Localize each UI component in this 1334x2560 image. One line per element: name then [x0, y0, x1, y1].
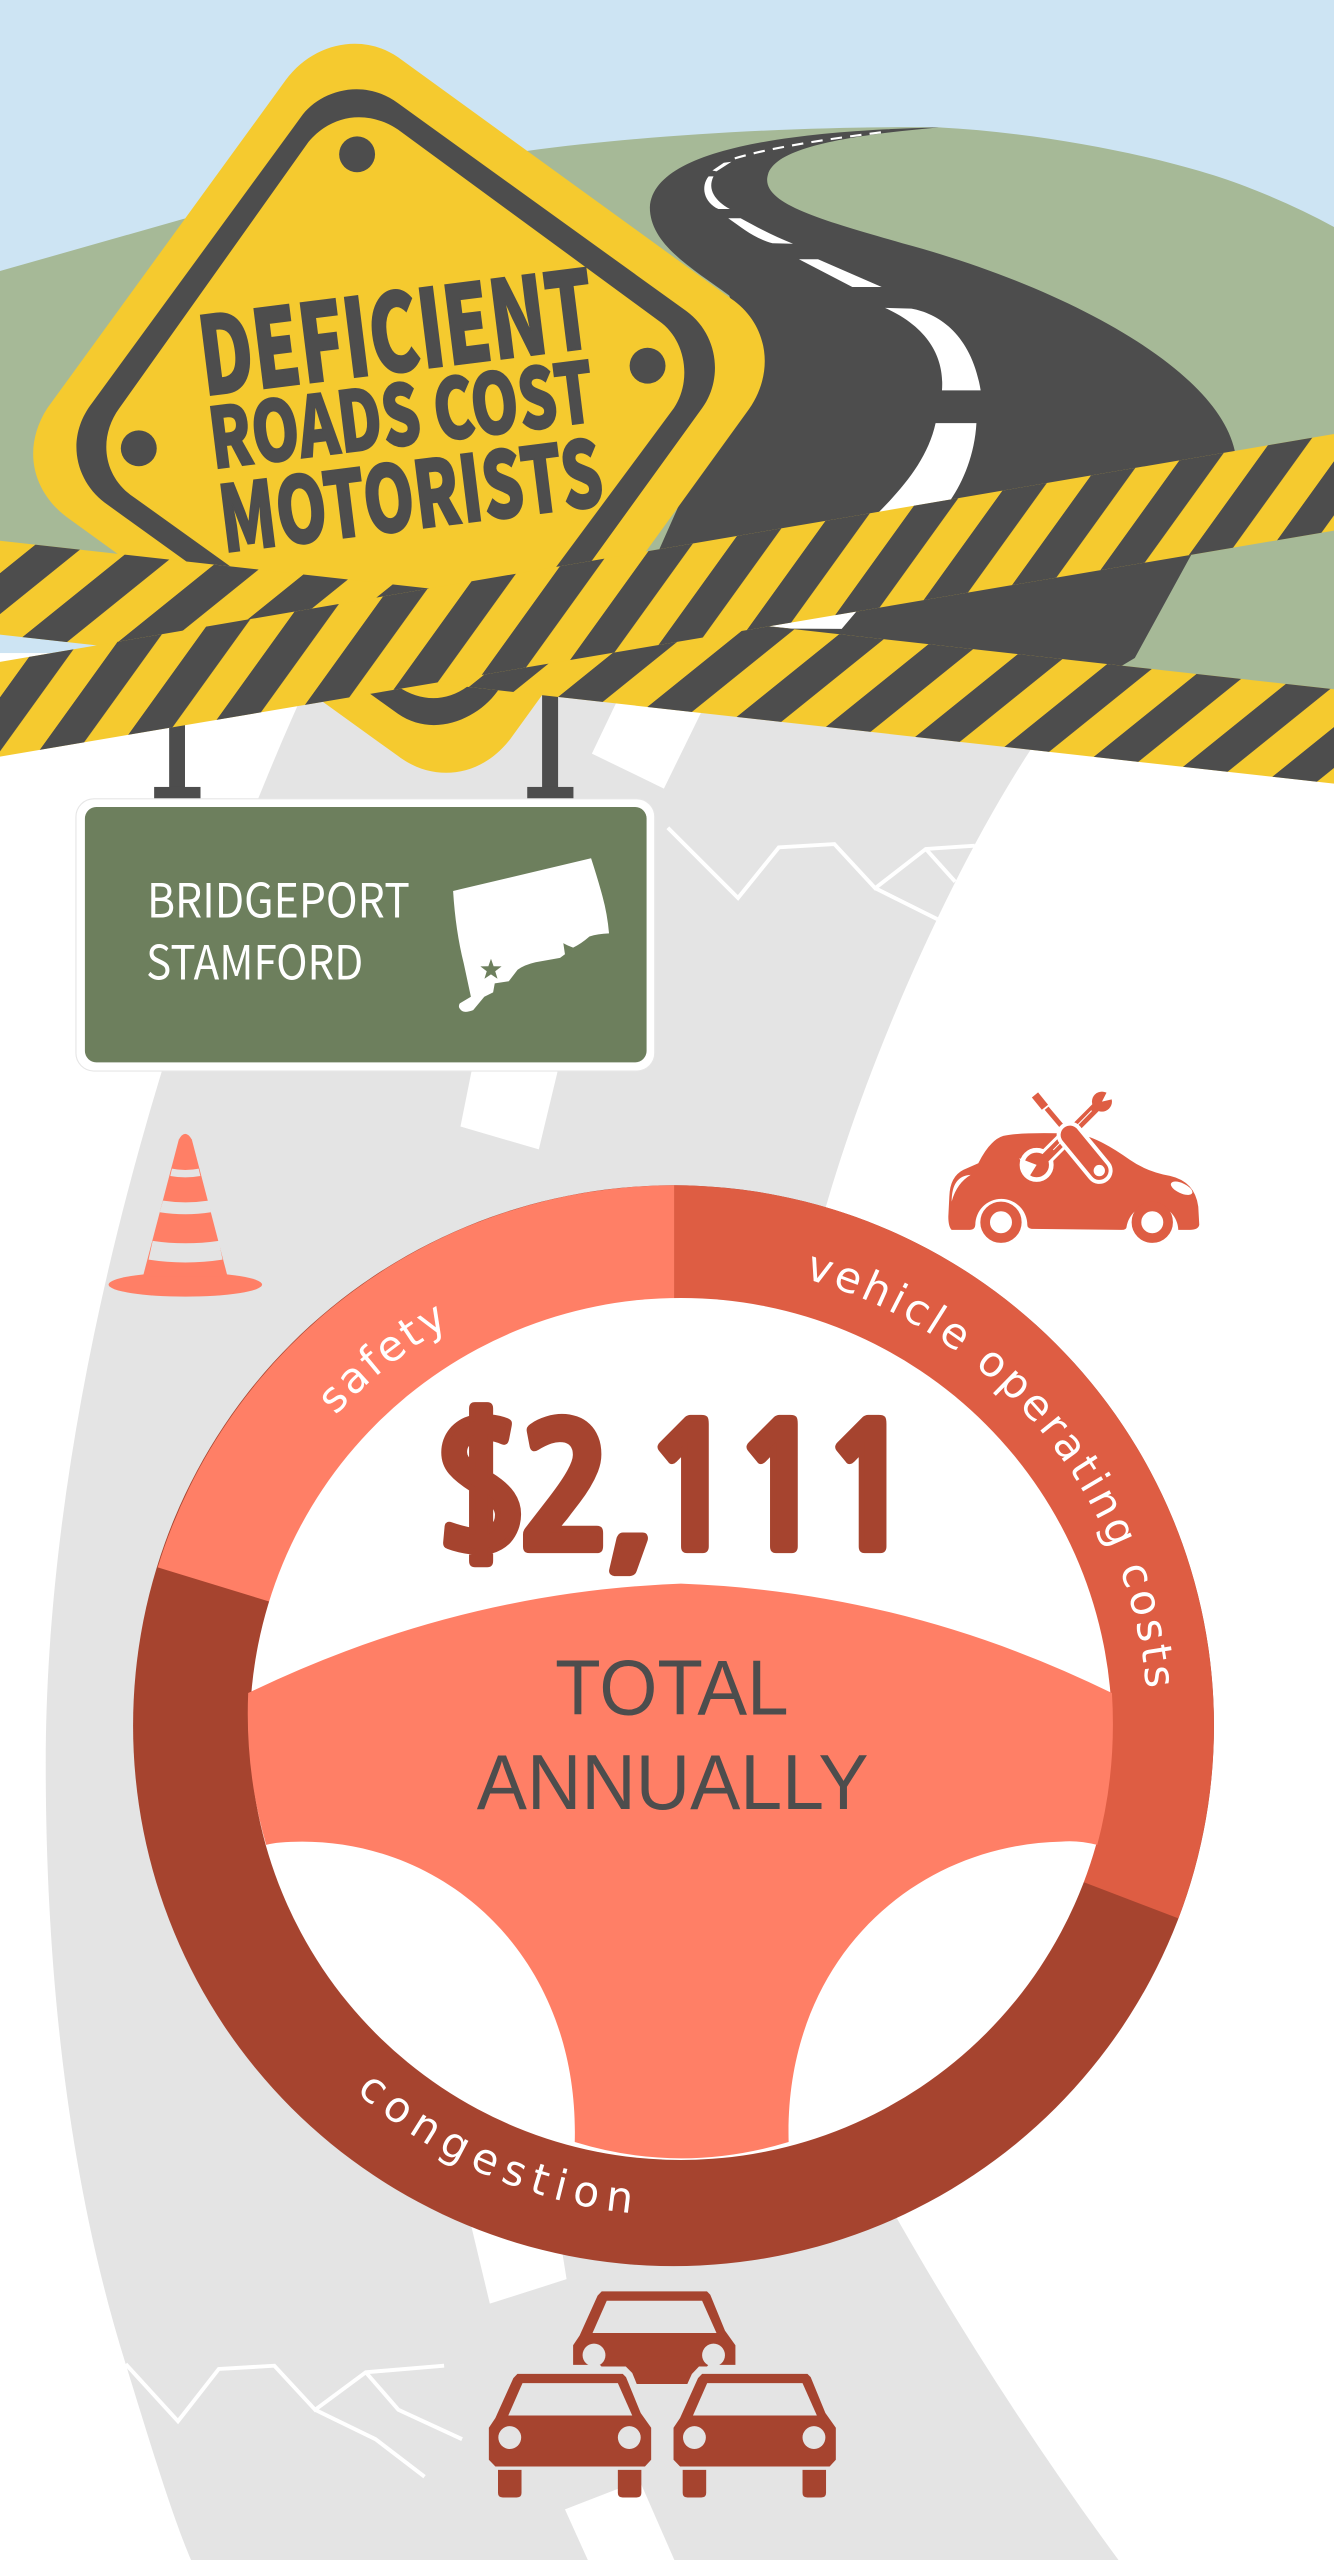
city names: STAMFORD: [146, 925, 363, 994]
highway sign panel: [76, 799, 655, 1071]
front left car: [489, 2374, 651, 2497]
label: congestion: congestion: [362, 2079, 630, 2213]
road dash bottom: [565, 2482, 674, 2560]
icon: traffic jam cars: [489, 2291, 836, 2497]
ring: vehicle operating costs: [674, 1185, 1214, 1918]
pavement crack lower: [126, 2364, 462, 2477]
sign bolts: [121, 136, 666, 466]
ring: safety: [158, 1185, 674, 1726]
title line 1: DEFICIENT: [189, 224, 602, 428]
road dash lower: [462, 2188, 567, 2304]
wheels: [985, 1206, 1168, 1238]
road dash top: [592, 694, 710, 789]
caution tape lower band: [0, 541, 1334, 784]
sign posts: [154, 686, 573, 799]
title line 2: ROADS COST: [201, 325, 600, 493]
ring: congestion: [133, 1185, 1214, 2266]
caution tape upper band: [0, 434, 1334, 757]
lights: [1169, 1179, 1194, 1198]
ring label paths: [336, 1267, 674, 1416]
steering wheel: [133, 1185, 1214, 2266]
sky: [0, 0, 1334, 653]
city names: [146, 863, 410, 994]
hills: [0, 127, 1334, 694]
icon: traffic cone: [109, 1134, 262, 1297]
car body: [948, 1133, 1199, 1230]
centre line dashes: [704, 162, 981, 629]
screwdriver: [1035, 1095, 1105, 1176]
sign yellow diamond: [33, 44, 765, 773]
icon: car with repair tools: [948, 1089, 1199, 1238]
icon: Connecticut map: [453, 858, 609, 1012]
wheel centre: [250, 1298, 1112, 2160]
pavement crack upper: [668, 828, 975, 919]
wheel spokes: [248, 1584, 1113, 2158]
back car: [573, 2291, 735, 2384]
warning sign: [33, 44, 765, 773]
wrench: [1019, 1089, 1117, 1180]
sign dark border: [76, 89, 715, 725]
total label line 1: TOTAL: [555, 1643, 789, 1731]
front right car: [674, 2374, 836, 2497]
city names: BRIDGEPORT: [147, 863, 410, 932]
total label line 2: ANNUALLY: [477, 1738, 869, 1826]
title: [189, 224, 609, 579]
label: safety: safety: [322, 1306, 441, 1414]
label: vehicle operating costs: vehicle operating costs: [812, 1256, 1172, 1686]
winding asphalt road: [620, 127, 1235, 668]
road dash middle: [460, 1061, 560, 1149]
title line 3: MOTORISTS: [211, 401, 609, 579]
total amount: $2,111: [433, 1404, 917, 1574]
grey road surface: [46, 678, 1118, 2560]
